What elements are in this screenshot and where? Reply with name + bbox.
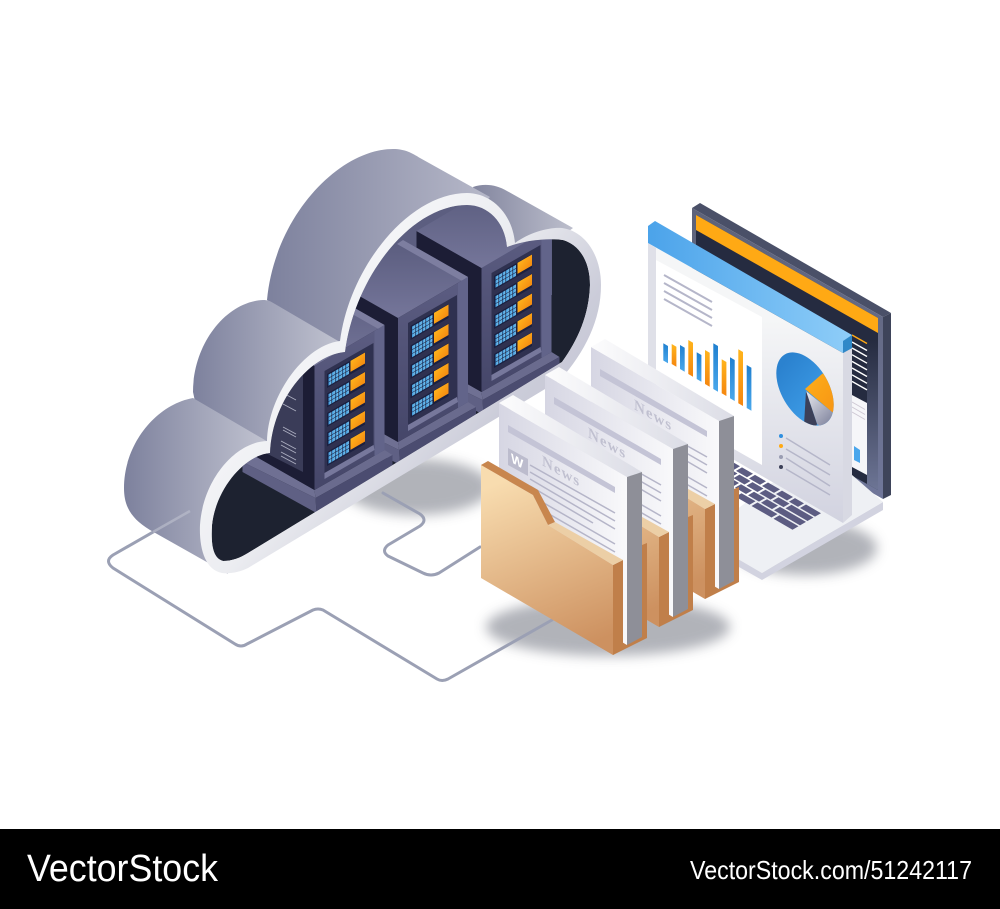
footer logo: VectorStock <box>27 848 219 890</box>
footer url: VectorStock.com/51242117 <box>690 855 972 885</box>
window title bar <box>648 221 852 353</box>
white content area <box>656 260 762 465</box>
news folder back <box>573 339 739 599</box>
W badge <box>508 448 528 476</box>
news heading: News <box>542 452 580 491</box>
connector lines <box>108 493 552 680</box>
server rack middle <box>326 240 476 465</box>
footer bar <box>0 829 1000 909</box>
cloud extrusion <box>124 149 573 574</box>
connector seen through cloud <box>153 511 190 532</box>
orange header band <box>696 215 878 333</box>
pie chart <box>776 352 834 426</box>
laptop <box>648 203 891 580</box>
laptop base <box>700 447 883 580</box>
application window <box>648 221 852 523</box>
text lines <box>664 275 712 326</box>
server rack left <box>242 288 392 513</box>
screen side stripes <box>852 335 867 390</box>
shadows <box>343 459 877 656</box>
side white panel <box>852 395 867 475</box>
W badge: W <box>511 450 524 472</box>
news folder back: News <box>634 396 672 435</box>
news folder middle: News <box>588 424 626 463</box>
server rack right <box>416 205 560 412</box>
news folder middle <box>527 367 693 627</box>
news folder front <box>481 395 647 655</box>
cloud opening with servers <box>212 205 590 561</box>
cloud server <box>124 149 601 580</box>
monitor screen <box>692 203 891 499</box>
bar chart <box>663 340 751 411</box>
cloud rim <box>200 193 601 573</box>
pie legend <box>779 434 830 495</box>
keyboard <box>704 462 821 530</box>
